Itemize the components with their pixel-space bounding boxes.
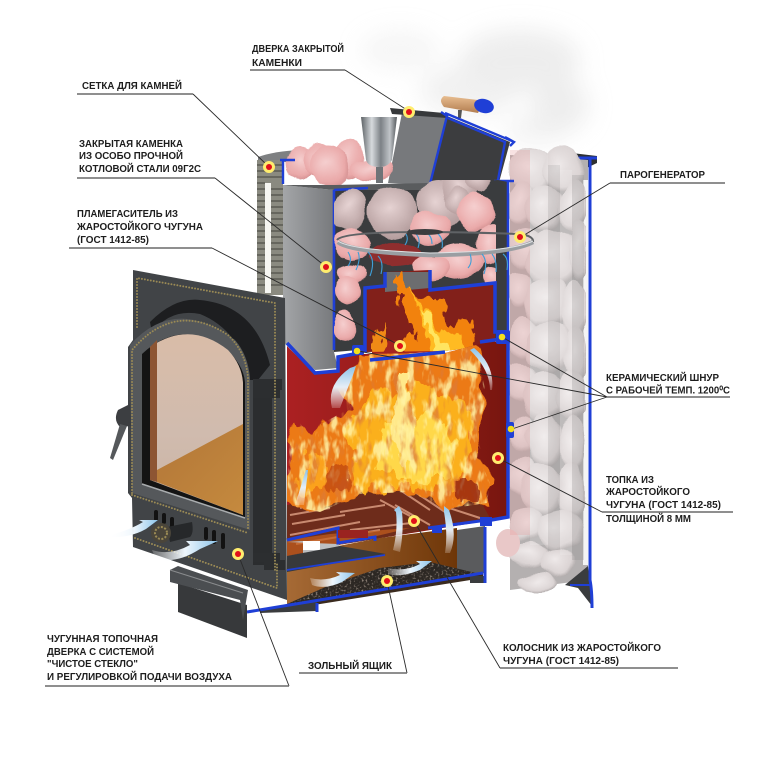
outer blue section (578, 158, 597, 608)
air flow arrows inside firebox (295, 348, 492, 553)
interior of stone chamber (280, 160, 508, 370)
air regulator knob (151, 522, 193, 543)
door plate (128, 270, 287, 600)
label: grate: ЧУГУНА (ГОСТ 1412-85) (503, 655, 619, 667)
section of firebox (287, 343, 360, 373)
label: flame damper: (ГОСТ 1412-85) (77, 234, 149, 246)
hinge column (253, 385, 272, 565)
lid handle (441, 96, 495, 118)
label: firebox: ЧУГУНА (ГОСТ 1412-85) (606, 499, 721, 511)
lower frame (130, 319, 250, 530)
label: door of closed heater (252, 42, 344, 69)
flames main (285, 345, 493, 556)
stones: outer column (496, 146, 587, 592)
bead rows (132, 278, 277, 588)
cast iron door (110, 270, 287, 600)
funnel top stones (285, 136, 392, 194)
upper flame (371, 271, 476, 352)
ash drawer chamber (247, 517, 492, 613)
base foot (260, 601, 317, 613)
label: firebox (605, 474, 721, 525)
door base plate (170, 566, 248, 638)
label: ceramic cord (606, 371, 730, 396)
arch shadow (150, 300, 270, 380)
bottom stone outside column (496, 529, 520, 557)
label: ceramic cord: КЕРАМИЧЕСКИЙ ШНУР (606, 371, 719, 384)
blue section of lid (425, 112, 514, 184)
label: cast iron door: И РЕГУЛИРОВКОЙ ПОДАЧИ ВОЗДУХА (47, 670, 232, 683)
label: firebox: ТОПКА ИЗ (606, 474, 654, 486)
dark red gaps in flames (324, 464, 352, 492)
logs (287, 488, 490, 556)
shell rim and back (258, 150, 300, 162)
section grate and base (247, 521, 485, 612)
stove outer shell (257, 150, 597, 608)
label underlines (45, 70, 733, 686)
callout markers (232, 106, 526, 587)
blue section of upper chamber (365, 270, 508, 352)
glass (150, 334, 243, 515)
lid (390, 108, 447, 118)
label: closed heater: ИЗ ОСОБО ПРОЧНОЙ (79, 149, 183, 162)
funnel (361, 117, 397, 183)
label: cast iron door: ДВЕРКА С СИСТЕМОЙ (47, 645, 154, 658)
stone tint bands (510, 150, 584, 560)
gray side wall of chamber (283, 185, 338, 370)
label: firebox: ТОЛЩИНОЙ 8 ММ (606, 512, 691, 525)
air flow arrows in ash drawer (310, 561, 432, 587)
label: closed heater (79, 138, 201, 175)
label: closed heater: ЗАКРЫТАЯ КАМЕНКА (79, 138, 183, 150)
label: steam generator: ПАРОГЕНЕРАТОР (620, 169, 705, 181)
section lines top (334, 181, 508, 350)
chimney outer gray face (388, 113, 447, 185)
label: stone mesh: СЕТКА ДЛЯ КАМНЕЙ (82, 79, 182, 92)
hinges (253, 379, 285, 570)
label: cast iron door: ЧУГУННАЯ ТОПОЧНАЯ (47, 633, 158, 645)
window recess (142, 334, 245, 518)
air flow arrows at door (110, 520, 218, 560)
latch handle (110, 404, 131, 460)
mesh for stones (257, 160, 283, 295)
label: ash drawer: ЗОЛЬНЫЙ ЯЩИК (308, 659, 393, 672)
label: door of closed heater: КАМЕНКИ (252, 57, 302, 69)
label: flame damper: ПЛАМЕГАСИТЕЛЬ ИЗ (77, 208, 178, 220)
loading chimney and lid (388, 96, 514, 186)
chimney interior (430, 116, 510, 186)
leader lines (193, 70, 610, 686)
label: flame damper: ЖАРОСТОЙКОГО ЧУГУНА (76, 220, 203, 233)
label: cast iron door: "ЧИСТОЕ СТЕКЛО" (47, 658, 138, 670)
label: flame damper (76, 208, 203, 246)
label: grate (503, 641, 661, 667)
label: grate: КОЛОСНИК ИЗ ЖАРОСТОЙКОГО (503, 641, 661, 654)
label: cast iron door (47, 633, 232, 683)
label: door of closed heater: ДВЕРКА ЗАКРЫТОЙ (252, 42, 344, 55)
stones inside chamber (334, 180, 496, 341)
water splashes (348, 232, 508, 276)
air vents (154, 510, 225, 549)
label: firebox: ЖАРОСТОЙКОГО (605, 485, 690, 498)
label: closed heater: КОТЛОВОЙ СТАЛИ 09Г2С (79, 162, 201, 175)
steam cloud (360, 30, 588, 144)
ash pile (287, 562, 480, 606)
lower firebox (285, 330, 514, 558)
label: ceramic cord: С РАБОЧЕЙ ТЕМП. 1200⁰С (606, 384, 730, 396)
steam generator ring (337, 229, 533, 276)
upper fire chamber (363, 270, 498, 354)
